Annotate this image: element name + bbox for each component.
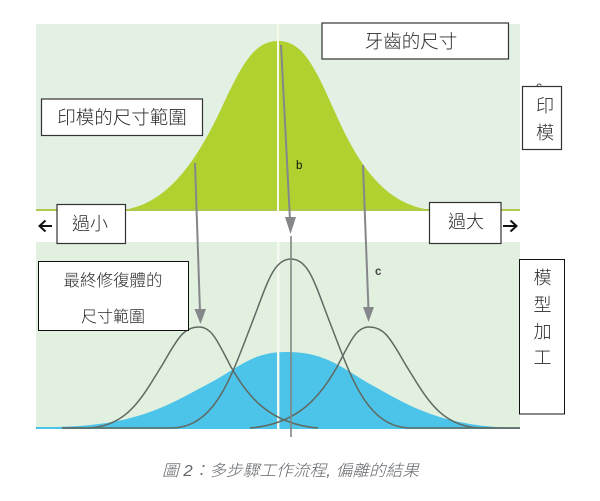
box: too small: 過小 (72, 214, 108, 234)
label: b: b (296, 160, 302, 172)
box: model processing: 工 (534, 348, 552, 368)
panel: impression distribution (36, 24, 520, 211)
box: impression: 印 (536, 96, 554, 116)
arrow: c (363, 165, 374, 322)
arrow: too large direction (503, 220, 516, 232)
box: model processing: 模 (534, 268, 552, 288)
box: too large: 過大 (448, 212, 484, 232)
center outline curve (62, 259, 520, 428)
arrow: b (281, 45, 296, 234)
green impression size curve (36, 41, 520, 211)
blue final restoration curve (36, 352, 520, 429)
box: final restoration size range: 最終修復體的 (64, 271, 162, 290)
box: model processing: 加 (534, 322, 552, 342)
stray c above impression box: c (536, 79, 542, 93)
box: impression size range (42, 99, 202, 136)
left outline curve (62, 327, 318, 428)
box: too small (57, 204, 126, 244)
box: tooth size (322, 23, 508, 59)
box: final restoration size range (38, 262, 188, 330)
box: model processing: 型 (534, 295, 552, 315)
box: model processing (520, 260, 564, 414)
box: final restoration size range: 尺寸範圍 (81, 308, 145, 326)
caption: 圖 2：多步驟工作流程, 偏離的結果 (162, 462, 420, 480)
panel: model processing distribution (36, 242, 520, 429)
box: too large (430, 202, 501, 244)
box: tooth size: 牙齒的尺寸 (365, 31, 457, 52)
arrow: too small direction (40, 220, 52, 232)
box: impression (522, 86, 562, 150)
box: impression size range: 印模的尺寸範圍 (57, 107, 187, 128)
arrow: left to final range (194, 163, 206, 324)
right outline curve (250, 327, 520, 428)
center reference line (290, 236, 292, 437)
box: impression: 模 (536, 123, 554, 143)
label: c: c (375, 266, 382, 278)
